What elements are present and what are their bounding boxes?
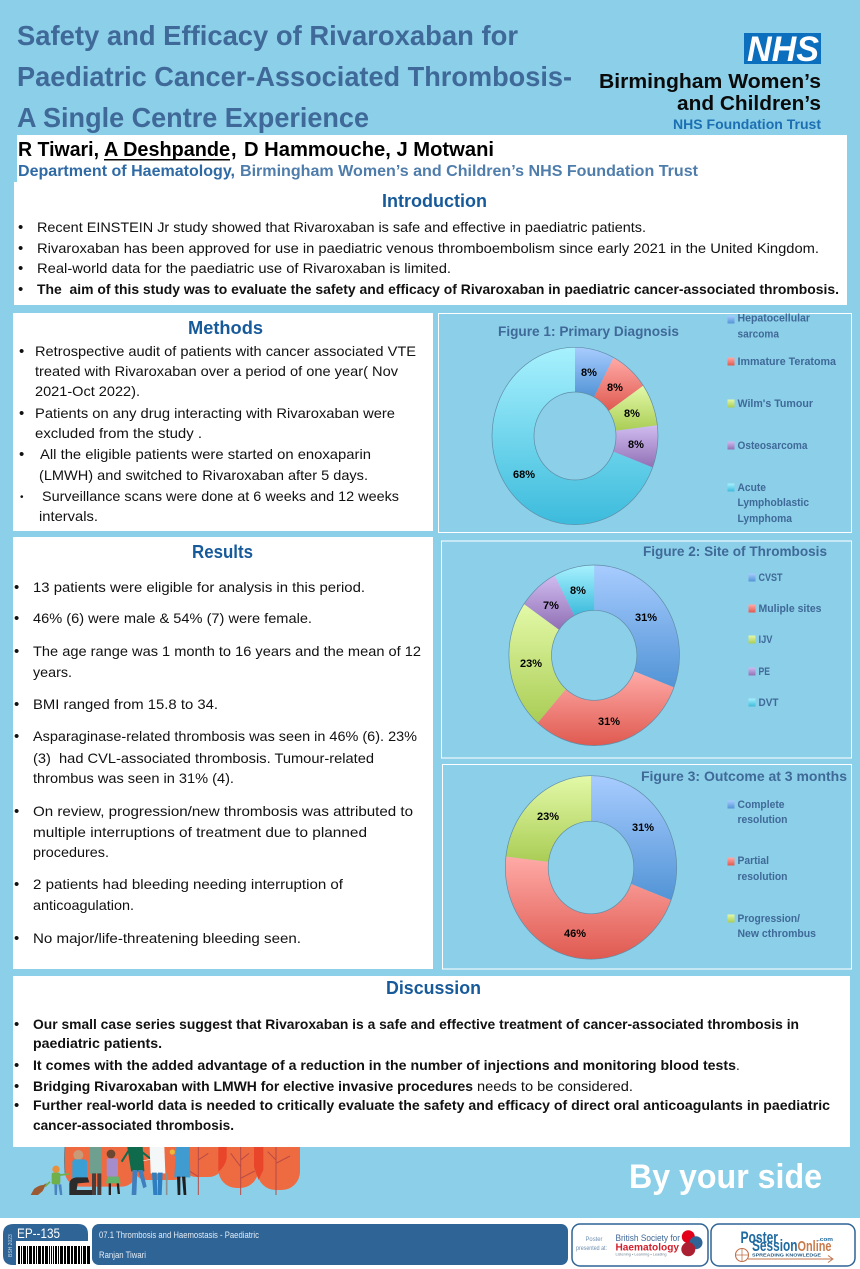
heading: figure 2: Figure 2: Site of Thrombosis [643,544,827,559]
logo: NHS trust: Birmingham Women’s [599,71,821,93]
text block: introduction bullets: The aim of this study was to evaluate the safety and efficacy of Rivaroxaban in paediatric cancer-associated thrombosis. [37,282,839,297]
logo: British Society for Haematology: Poster [586,1236,603,1243]
text block: introduction bullets: Real-world data for the paediatric use of Rivaroxaban is limited. [37,261,451,276]
text block: methods bullets: • [19,446,24,463]
authors: A Deshpande [104,139,230,161]
legend: figure 3: Progression/ [738,913,800,925]
legend: figure 1: Acute [738,482,766,494]
affiliation [18,163,698,180]
logo: Poster Session Online [711,1224,855,1266]
panel: introduction [14,182,847,305]
donut chart: primary diagnosis [492,347,658,525]
text block: results bullets: • [14,696,19,713]
text block: results bullets: 13 patients were eligible for analysis in this period. [33,580,365,595]
logo: NHS trust: and Children’s [677,93,821,115]
text block: results bullets: anticoagulation. [33,898,134,913]
text block: results bullets: • [14,610,19,627]
donut chart: outcome [505,776,677,959]
text block: results bullets: thrombus was seen in 31% (4). [33,771,234,786]
panel: figure 1 primary diagnosis [438,312,852,532]
title: Paediatric Cancer-Associated Thrombosis- [17,61,572,92]
illustration: people and trees [31,1107,300,1195]
text block: discussion bullets: • [14,1078,19,1095]
slogan: By your side [629,1158,822,1196]
heading: introduction: Introduction [382,191,487,211]
legend: figure 3: resolution [738,814,788,826]
legend: figure 1: Lymphoblastic [738,497,809,509]
text block: methods bullets: excluded from the study . [35,426,202,441]
donut chart: primary diagnosis: 68% [513,469,535,481]
text block: discussion bullets: • [14,1057,19,1074]
donut chart: primary diagnosis: 8% [581,367,597,379]
logo: Poster Session Online: Online [798,1238,832,1255]
title: A Single Centre Experience [17,102,369,133]
legend: figure 3: Partial [738,855,769,867]
footer strip [0,1218,860,1269]
text block: discussion bullets: • [14,1016,19,1033]
donut chart: primary diagnosis: 8% [607,382,623,394]
legend: figure 2: Muliple sites [758,603,822,615]
text block: introduction bullets: Recent EINSTEIN Jr study showed that Rivaroxaban is safe and effective in paediatric patients. [37,220,646,235]
heading: figure 3: Figure 3: Outcome at 3 months [641,769,847,784]
title [17,20,572,133]
legend: figure 1: Wilm's Tumour [738,398,813,410]
donut chart: site of thrombosis [509,565,680,746]
heading: figure 1: Figure 1: Primary Diagnosis [498,324,679,339]
logo: Poster Session Online: Session [752,1236,798,1255]
text block: discussion bullets: Bridging Rivaroxaban with LMWH for elective invasive procedures [33,1079,473,1094]
text block: methods bullets [19,343,416,524]
logo: NHS trust: NHS Foundation Trust [673,116,821,132]
authors: , [231,139,237,161]
logo: Poster Session Online: Poster [740,1228,778,1247]
legend: figure 1: sarcoma [738,328,779,340]
heading: methods: Methods [188,318,263,338]
text block: results bullets: • [14,876,19,893]
text block: results bullets: years. [33,665,72,680]
text block: results bullets: BMI ranged from 15.8 to 34. [33,697,218,712]
text block: discussion bullets: cancer-associated thrombosis. [33,1118,234,1133]
authors [18,139,494,161]
session banner: 07.1 Thrombosis and Haemostasis - Paediatric [99,1230,259,1240]
text block: discussion bullets: paediatric patients. [33,1036,162,1051]
text block: discussion bullets [14,1016,830,1133]
donut chart: outcome: 46% [564,928,586,940]
text block: introduction bullets [18,219,839,298]
panel: results [13,537,433,969]
heading: discussion: Discussion [386,978,481,998]
title: Safety and Efficacy of Rivaroxaban for [17,20,518,51]
text block: discussion bullets: needs to be considered. [477,1079,633,1094]
text block: introduction bullets: • [18,281,23,298]
text block: methods bullets: (LMWH) and switched to Rivaroxaban after 5 days. [39,468,368,483]
text block: results bullets: • [14,579,19,596]
panel: figure 2 site of thrombosis [442,541,852,758]
text block: methods bullets: • [20,492,24,503]
legend: figure 3: Complete [738,799,785,811]
text block: discussion bullets: Our small case series suggest that Rivaroxaban is a safe and effective treatment of cancer-associated thrombosis in [33,1017,799,1032]
text block: methods bullets: 2021-Oct 2022). [35,384,140,399]
text block: introduction bullets: Rivaroxaban has been approved for use in paediatric venous thromboembolism since early 2021 in the United Kingdom. [37,241,819,256]
text block: results bullets: On review, progression/new thrombosis was attributed to [33,804,413,819]
authors: D Hammouche, J Motwani [244,139,494,161]
text block: results bullets: • [14,728,19,745]
donut chart: site of thrombosis: 23% [520,658,542,670]
donut chart: primary diagnosis: 8% [624,408,640,420]
text block: methods bullets: Surveillance scans were done at 6 weeks and 12 weeks [42,489,399,504]
heading: results: Results [192,542,253,562]
text block: results bullets: 2 patients had bleeding needing interruption of [33,877,343,892]
legend: figure 1: Immature Teratoma [738,356,836,368]
affiliation: Department of Haematology, [18,163,235,180]
logo: British Society for Haematology: Listening • Learning • Leading [616,1252,666,1256]
donut chart: site of thrombosis: 31% [635,612,657,624]
legend: figure 3: resolution [738,871,788,883]
text block: results bullets: • [14,643,19,660]
panel: figure 3 outcome at 3 months [442,764,852,969]
text block: methods bullets: • [19,405,24,422]
donut chart: site of thrombosis: 31% [598,716,620,728]
poster id and barcode [3,1224,90,1265]
donut chart: outcome: 23% [537,811,559,823]
donut chart: site of thrombosis: 7% [543,600,559,612]
legend: figure 3: New cthrombus [738,928,816,940]
text block: methods bullets: treated with Rivaroxaban over a period of one year( Nov [35,364,398,379]
text block: results bullets: (3) had CVL-associated thrombosis. Tumour-related [33,751,374,766]
logo: British Society for Haematology: presented at: [576,1245,607,1252]
poster id and barcode: BSH 2023 [8,1234,14,1257]
text block: results bullets: multiple interruptions of treatment due to planned [33,825,367,840]
legend: figure 1 [728,312,836,525]
text block: results bullets: Asparaginase-related thrombosis was seen in 46% (6). 23% [33,729,417,744]
logo: British Society for Haematology: Haematology [616,1242,679,1254]
text block: results bullets: No major/life-threatening bleeding seen. [33,931,301,946]
logo: British Society for Haematology [572,1224,708,1266]
legend: figure 2 [748,572,822,709]
authors: R Tiwari, [18,139,99,161]
text block: discussion bullets: . [736,1058,740,1073]
text block: results bullets: • [14,930,19,947]
logo: Poster Session Online: SPREADING KNOWLEDGE [752,1252,821,1258]
text block: results bullets: The age range was 1 month to 16 years and the mean of 12 [33,644,421,659]
text block: results bullets: procedures. [33,845,109,860]
text block: introduction bullets: • [18,260,23,277]
legend: figure 2: PE [758,666,770,678]
text block: discussion bullets: Further real-world data is needed to critically evaluate the safety and efficacy of direct oral anticoagulants in paediatric [33,1098,830,1113]
text block: introduction bullets: • [18,219,23,236]
panel: discussion [13,976,850,1147]
text block: methods bullets: Retrospective audit of patients with cancer associated VTE [35,344,416,359]
text block: discussion bullets: It comes with the added advantage of a reduction in the number of injections and monitoring blood tests [33,1058,736,1073]
affiliation: Birmingham Women’s and Children’s NHS Foundation Trust [240,163,698,180]
text block: methods bullets: intervals. [39,509,98,524]
donut chart: primary diagnosis: 8% [628,439,644,451]
legend: figure 3 [728,799,816,940]
legend: figure 1: Hepatocellular [738,312,810,324]
logo: Poster Session Online: .com [818,1237,834,1243]
text block: methods bullets: Patients on any drug interacting with Rivaroxaban were [35,406,395,421]
panel: methods [13,313,433,531]
logo: British Society for Haematology: British Society for [616,1233,680,1243]
text block: results bullets: • [14,803,19,820]
text block: results bullets: 46% (6) were male & 54% (7) were female. [33,611,312,626]
text block: methods bullets: • [19,343,24,360]
donut chart: site of thrombosis: 8% [570,585,586,597]
legend: figure 2: DVT [758,697,779,709]
legend: figure 1: Lymphoma [738,513,792,525]
session banner [92,1224,568,1265]
panel: authors [17,135,847,183]
logo: NHS trust: NHS [747,30,819,69]
text block: results bullets [14,579,421,947]
legend: figure 2: CVST [758,572,783,584]
logo: NHS trust [599,30,821,132]
text block: methods bullets: All the eligible patients were started on enoxaparin [40,447,371,462]
donut chart: outcome: 31% [632,822,654,834]
legend: figure 1: Osteosarcoma [738,440,808,452]
text block: discussion bullets: • [14,1097,19,1114]
session banner: Ranjan Tiwari [99,1250,146,1260]
legend: figure 2: IJV [758,634,772,646]
text block: introduction bullets: • [18,240,23,257]
poster id and barcode: EP--135 [17,1225,60,1241]
